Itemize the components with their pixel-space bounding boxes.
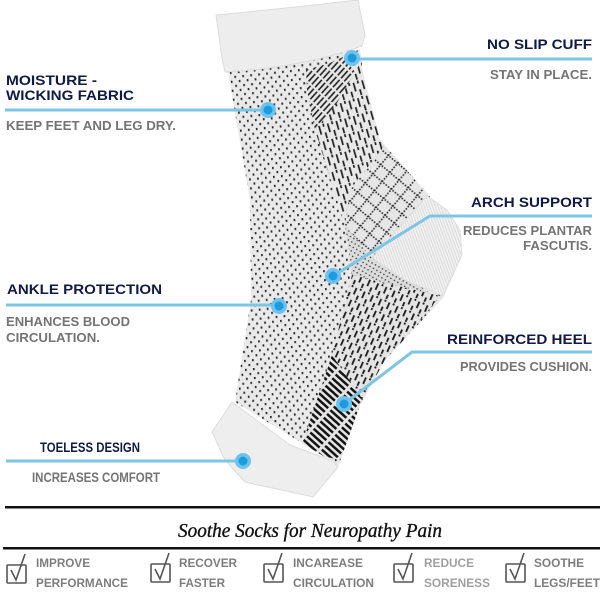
benefit: increase circulation: CIRCULATION xyxy=(293,576,374,590)
callout: ankle protection: ANKLE PROTECTION xyxy=(7,281,162,297)
callout: reinforced heel: PROVIDES CUSHION. xyxy=(460,359,592,374)
toe band xyxy=(212,402,338,497)
top cuff xyxy=(216,0,365,72)
benefit: reduce soreness: REDUCE xyxy=(424,556,474,570)
benefit: improve performance xyxy=(7,554,128,590)
callout: no slip cuff xyxy=(344,36,592,82)
callout: arch support: REDUCES PLANTAR xyxy=(463,223,593,238)
footer second rule xyxy=(3,547,600,550)
sock illustration xyxy=(212,0,475,497)
callout: arch support: FASCUTIS. xyxy=(523,238,592,253)
footer top rule xyxy=(5,506,600,508)
icon: checkbox xyxy=(394,553,413,582)
benefit: improve performance: IMPROVE xyxy=(36,556,90,570)
benefit: increase circulation: INCAREASE xyxy=(293,556,363,570)
upper diagonal knit panel xyxy=(306,57,355,130)
callout: moisture wicking fabric: WICKING FABRIC xyxy=(6,87,134,103)
callout: reinforced heel: REINFORCED HEEL xyxy=(447,331,592,347)
callout: arch support: ARCH SUPPORT xyxy=(471,194,592,210)
callout: moisture wicking fabric: KEEP FEET AND LEG DRY. xyxy=(6,118,176,133)
icon: checkbox xyxy=(264,553,283,582)
benefit: recover faster: FASTER xyxy=(179,576,225,590)
callout: ankle protection: ENHANCES BLOOD xyxy=(6,314,130,329)
benefit: soothe legs and feet: SOOTHE xyxy=(534,556,584,570)
callout: arch support xyxy=(325,194,593,284)
benefit: increase circulation xyxy=(264,553,374,590)
callout: toeless design: TOELESS DESIGN xyxy=(40,439,140,455)
footer title: Soothe Socks for Neuropathy Pain xyxy=(178,520,442,542)
callout: no slip cuff: STAY IN PLACE. xyxy=(490,67,592,82)
icon: checkbox xyxy=(7,554,26,583)
mid fine knit xyxy=(345,225,430,294)
callout: moisture wicking fabric: MOISTURE - xyxy=(6,72,97,88)
benefit: soothe legs and feet: LEGS/FEET xyxy=(534,576,601,590)
callout: no slip cuff: NO SLIP CUFF xyxy=(487,36,592,52)
callout: reinforced heel xyxy=(336,331,592,412)
icon: checkbox xyxy=(151,553,170,582)
benefit: improve performance: PERFORMANCE xyxy=(36,576,128,590)
sock body xyxy=(228,50,454,466)
benefit: recover faster: RECOVER xyxy=(179,556,237,570)
icon: checkbox xyxy=(506,553,525,582)
lattice panel xyxy=(345,145,430,258)
lower dash panel xyxy=(332,275,440,400)
callout: ankle protection xyxy=(6,281,287,345)
heel cup xyxy=(372,196,462,296)
benefit: reduce soreness: SORENESS xyxy=(424,576,490,590)
heel stripe panel xyxy=(300,355,363,462)
callout: toeless design xyxy=(6,439,251,485)
callout: toeless design: INCREASES COMFORT xyxy=(32,469,160,485)
callout: moisture wicking fabric xyxy=(5,72,276,133)
benefit: soothe legs and feet xyxy=(506,553,601,590)
callout: ankle protection: CIRCULATION. xyxy=(6,330,100,345)
benefit: reduce soreness xyxy=(394,553,490,590)
benefit: recover faster xyxy=(151,553,237,590)
ankle dash panel xyxy=(315,60,385,225)
